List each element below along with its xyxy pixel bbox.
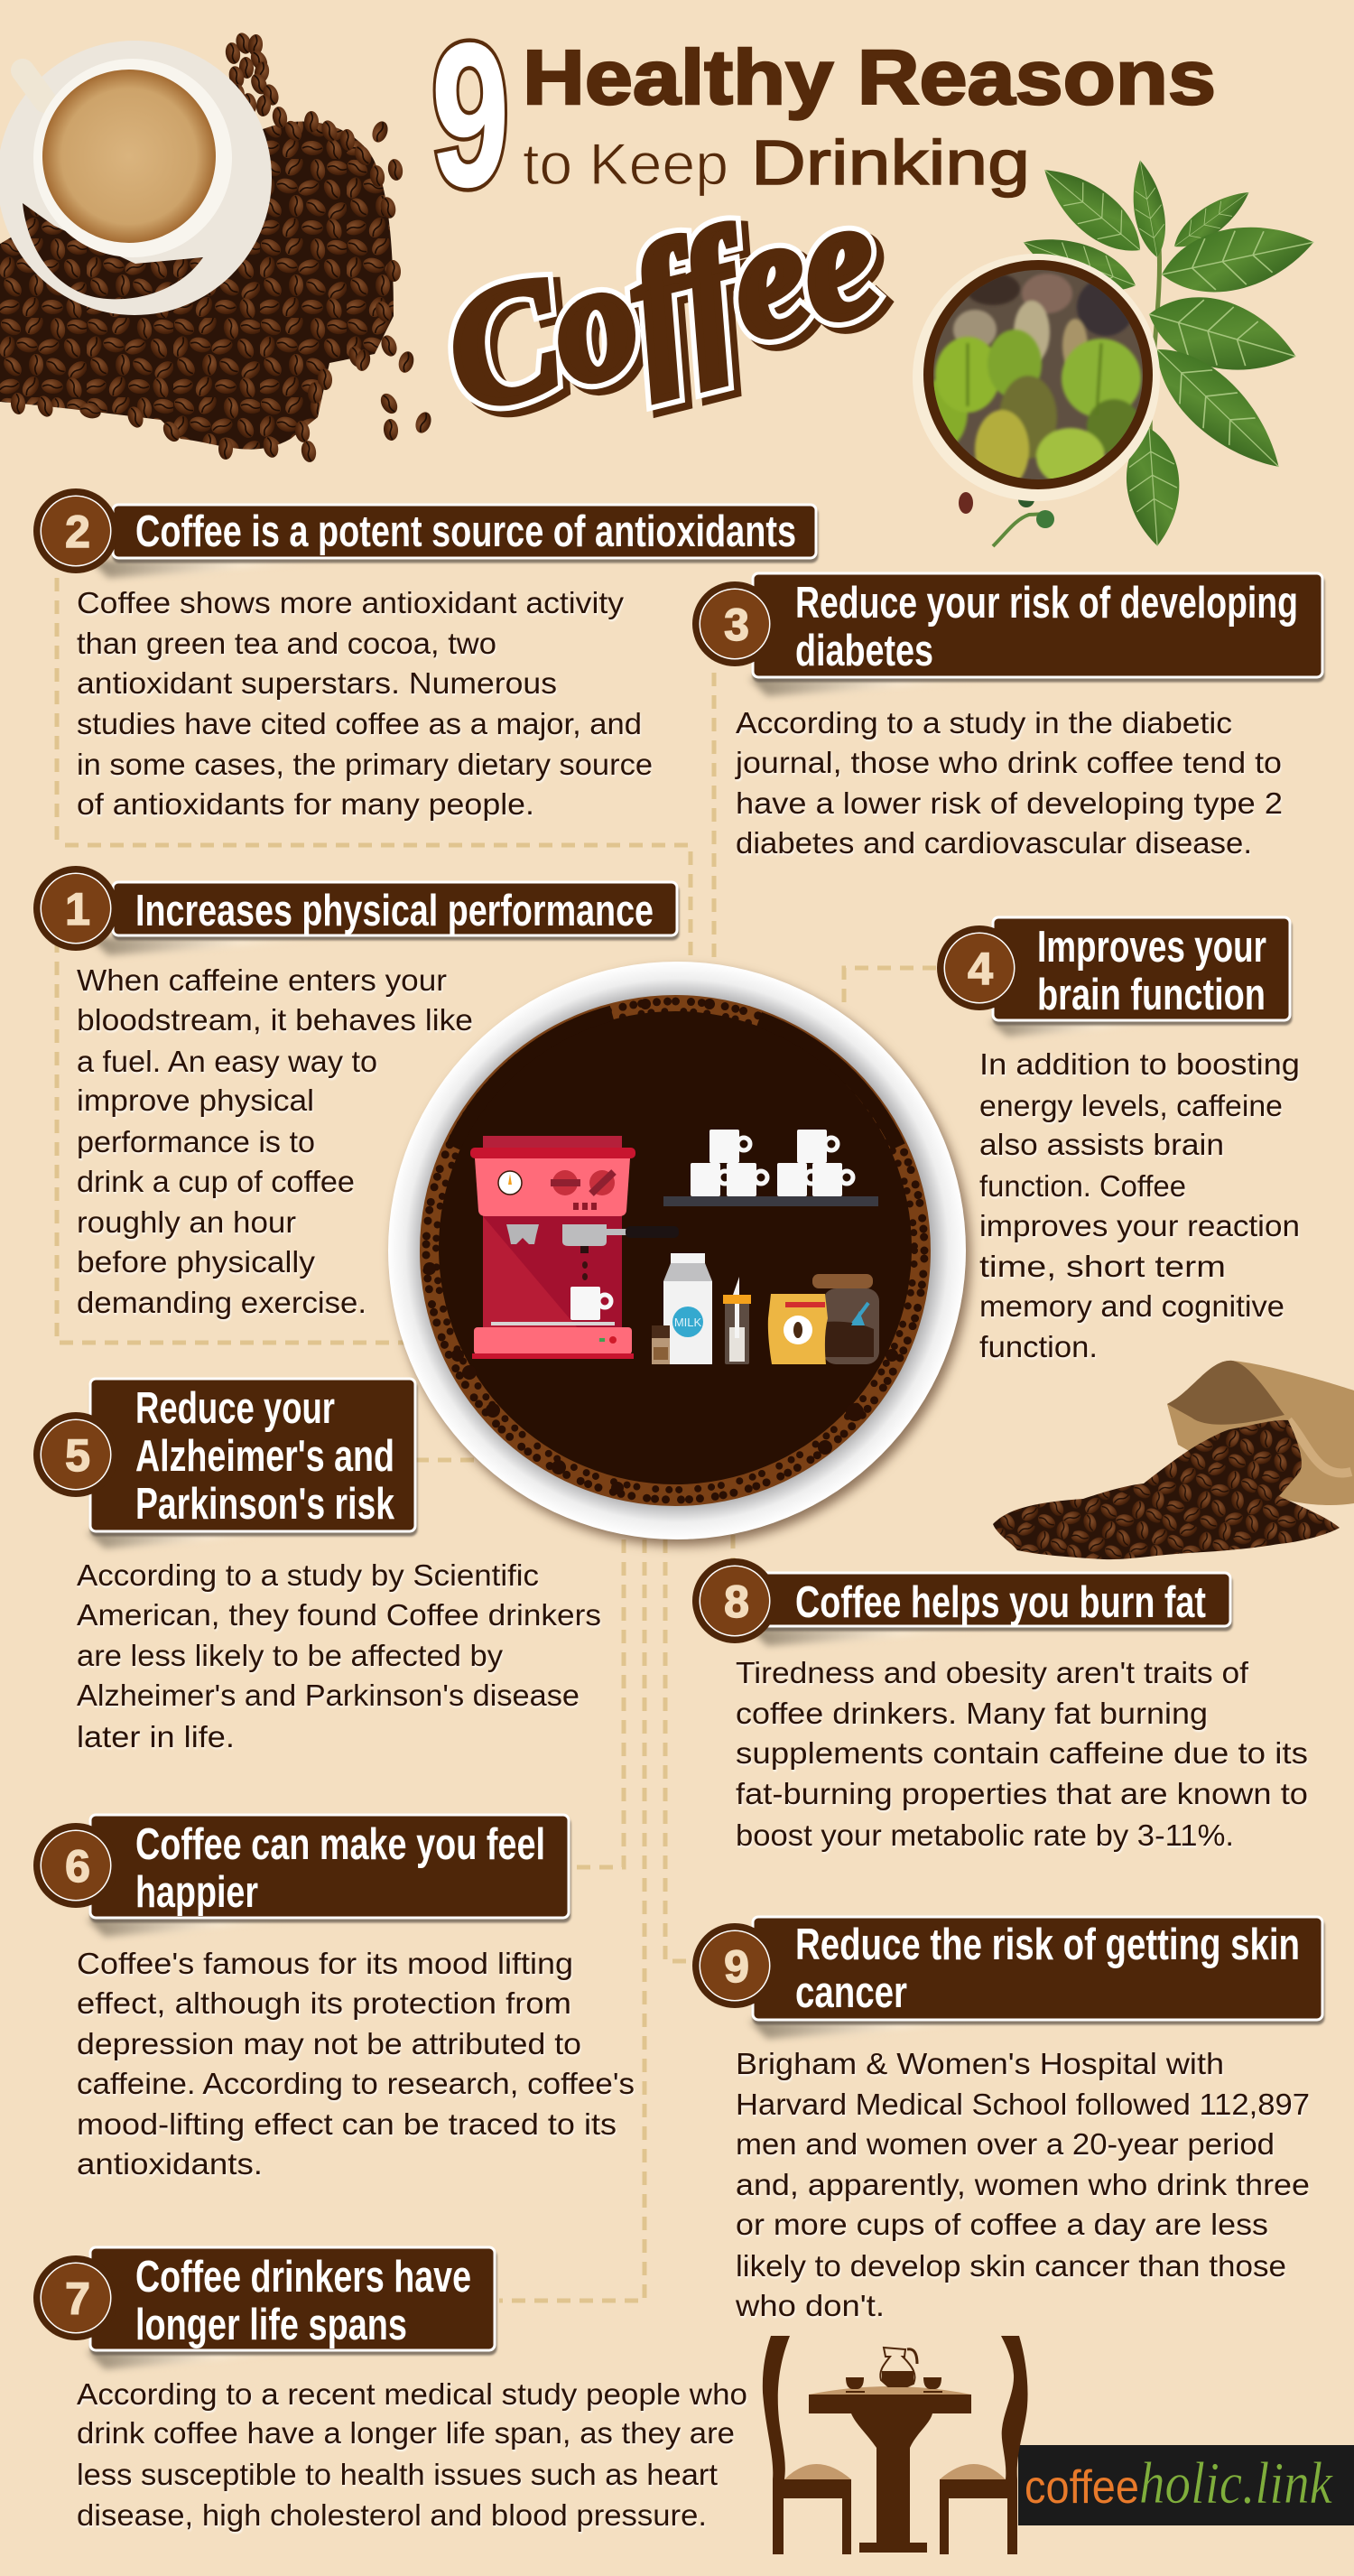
body text: performance is to: [77, 1125, 315, 1158]
body text: function.: [979, 1330, 1098, 1363]
body text: Tiredness and obesity aren't traits of: [736, 1656, 1249, 1689]
body text: antioxidant superstars. Numerous: [77, 666, 557, 700]
body text: diabetes and cardiovascular disease.: [736, 826, 1252, 860]
number badge: [937, 925, 1022, 1010]
heading bar: [87, 1815, 569, 1937]
heading bar: Reduce your: [135, 1384, 335, 1433]
script word Coffee: Coffee: [429, 163, 895, 447]
image: coffee cup on saucer with scattered beans: [0, 31, 434, 463]
coffee crema: [42, 70, 216, 243]
body text: bloodstream, it behaves like: [77, 1003, 473, 1037]
body text: of antioxidants for many people.: [77, 787, 534, 821]
body text: Harvard Medical School followed 112,897: [736, 2088, 1310, 2121]
body text: depression may not be attributed to: [77, 2027, 581, 2060]
script word Coffee: Coffee: [436, 168, 901, 452]
body text: American, they found Coffee drinkers: [77, 1598, 601, 1632]
sugar shaker: [723, 1277, 751, 1364]
body text: than green tea and cocoa, two: [77, 627, 496, 660]
stacked cups: [691, 1130, 853, 1196]
heading bar: Improves your: [1037, 923, 1266, 972]
image: burlap sack spilling coffee beans: [993, 1361, 1354, 1559]
body text: disease, high cholesterol and blood pressure.: [77, 2498, 707, 2532]
coffee surface bubbles: [420, 995, 931, 1506]
body text: men and women over a 20-year period: [736, 2127, 1275, 2161]
milk carton: [652, 1253, 712, 1364]
body text: a fuel. An easy way to: [77, 1045, 377, 1078]
number badge: [692, 581, 777, 666]
number badge: 1: [65, 884, 90, 935]
body text: have a lower risk of developing type 2: [736, 786, 1283, 820]
berries: [993, 514, 1045, 546]
body text: coffee drinkers. Many fat burning: [736, 1697, 1208, 1730]
heading bar: [749, 1917, 1322, 2039]
body text: memory and cognitive: [979, 1289, 1284, 1323]
heading bar: cancer: [795, 1968, 907, 2017]
number badge: [33, 1412, 118, 1497]
number badge: [692, 1923, 777, 2008]
body text: [77, 1558, 601, 1753]
heading bar: [87, 2247, 495, 2369]
bean circle halo: [913, 254, 1160, 501]
body text: [736, 1656, 1308, 1852]
heading bar: Parkinson's risk: [135, 1480, 395, 1529]
body text: [77, 586, 653, 821]
panel: reason 1: [33, 866, 677, 1319]
body text: According to a study by Scientific: [77, 1558, 539, 1592]
body text: When caffeine enters your: [77, 963, 447, 997]
title line 2: to Keep: [523, 131, 728, 197]
body text: fat-burning properties that are known to: [736, 1777, 1308, 1810]
heading bar: Alzheimer's and: [135, 1432, 394, 1481]
milk carton: MILK: [674, 1316, 701, 1329]
body text: time, short term: [979, 1250, 1226, 1283]
body text: function. Coffee: [979, 1169, 1186, 1203]
body text: likely to develop skin cancer than those: [736, 2249, 1286, 2283]
number badge: 9: [724, 1941, 749, 1992]
right chair: [940, 2336, 1028, 2554]
number badge: 5: [65, 1430, 90, 1481]
logo band: coffee: [1025, 2461, 1139, 2514]
number badge: [33, 866, 118, 951]
shelf: [663, 1196, 878, 1206]
body text: [77, 963, 473, 1319]
body text: are less likely to be affected by: [77, 1639, 504, 1672]
body text: [979, 1047, 1300, 1363]
title line 2 bold: Drinking: [751, 127, 1030, 198]
body text: later in life.: [77, 1720, 235, 1753]
body text: antioxidants.: [77, 2147, 263, 2181]
body text: journal, those who drink coffee tend to: [735, 746, 1282, 779]
body text: Alzheimer's and Parkinson's disease: [77, 1679, 580, 1712]
heading bar: diabetes: [795, 627, 933, 675]
heading bar: Coffee helps you burn fat: [795, 1578, 1206, 1627]
bean circle ring: [923, 260, 1153, 489]
body text: caffeine. According to research, coffee's: [77, 2067, 635, 2100]
body text: Coffee shows more antioxidant activity: [77, 586, 625, 619]
heading bar: [90, 882, 677, 955]
big numeral 9: [431, 1, 509, 228]
body text: also assists brain: [979, 1128, 1224, 1161]
body text: [735, 2047, 1310, 2322]
cup handle: [23, 70, 45, 101]
coffee pot and cups: [846, 2348, 942, 2393]
panel: reason 7: [33, 2247, 747, 2532]
body text: roughly an hour: [77, 1205, 296, 1239]
heading bar: happier: [135, 1868, 258, 1917]
body text: studies have cited coffee as a major, and: [77, 707, 642, 740]
body text: [77, 1947, 635, 2181]
body text: According to a recent medical study people who: [77, 2377, 747, 2411]
connector lines: [57, 578, 941, 2301]
big numeral 9: 9: [431, 1, 509, 228]
heading bar: [90, 505, 816, 578]
body text: [77, 2377, 747, 2532]
image: round coffee cup with espresso station: [388, 962, 966, 1539]
body text: [735, 706, 1283, 860]
left chair: [763, 2336, 851, 2554]
number badge: [33, 2255, 118, 2340]
white rim: [388, 962, 966, 1539]
number badge: [33, 1823, 118, 1908]
body text: demanding exercise.: [77, 1286, 366, 1319]
panel: reason 8: [692, 1558, 1308, 1852]
body text: drink a cup of coffee: [77, 1165, 355, 1198]
title line 1: Healthy Reasons: [523, 35, 1216, 121]
body text: effect, although its protection from: [77, 1986, 571, 2020]
number badge: 2: [65, 507, 90, 557]
title: [429, 1, 1216, 454]
heading bar: [989, 917, 1290, 1037]
espresso machine: [470, 1136, 679, 1359]
body text: According to a study in the diabetic: [736, 706, 1232, 739]
icon: cafe table and chairs: [763, 2336, 1028, 2554]
panel: reason 4: [937, 917, 1300, 1363]
body text: energy levels, caffeine: [979, 1089, 1283, 1122]
body text: and, apparently, women who drink three: [736, 2168, 1310, 2201]
panel: reason 6: [33, 1815, 635, 2181]
saucer: [0, 41, 272, 315]
number badge: 3: [724, 600, 749, 650]
body text: who don't.: [735, 2289, 885, 2322]
body text: in some cases, the primary dietary source: [77, 748, 653, 781]
body text: before physically: [77, 1245, 316, 1279]
body text: improves your reaction: [979, 1209, 1300, 1242]
heading bar: Coffee drinkers have: [135, 2253, 471, 2302]
panel: reason 2: [33, 488, 816, 821]
coffee bag: [768, 1294, 828, 1364]
body text: drink coffee have a longer life span, as they are: [77, 2416, 735, 2450]
body text: Brigham & Women's Hospital with: [736, 2047, 1224, 2080]
heading bar: brain function: [1037, 971, 1266, 1019]
heading bar: [749, 573, 1322, 696]
heading bar: Coffee is a potent source of antioxidants: [135, 507, 796, 556]
heading bar: longer life spans: [135, 2301, 407, 2349]
heading bar: Coffee can make you feel: [135, 1820, 545, 1869]
body text: or more cups of coffee a day are less: [736, 2208, 1268, 2241]
coffee jar: [812, 1274, 879, 1364]
cup: [33, 59, 232, 257]
number badge: [33, 488, 118, 573]
number badge: 6: [65, 1841, 90, 1892]
logo band: [1018, 2445, 1354, 2525]
number badge: 8: [724, 1576, 749, 1627]
body text: less susceptible to health issues such as heart: [77, 2458, 718, 2491]
script word Coffee: Coffee: [429, 163, 895, 447]
body text: mood-lifting effect can be traced to its: [77, 2107, 617, 2141]
body text: supplements contain caffeine due to its: [736, 1736, 1308, 1770]
heading bar: Increases physical performance: [135, 887, 654, 935]
number badge: [692, 1558, 777, 1643]
panel: reason 5: [33, 1379, 601, 1753]
table: [809, 2386, 971, 2553]
panel: reason 3: [692, 573, 1322, 860]
big numeral 9: 9: [431, 1, 509, 228]
number badge: 4: [968, 944, 993, 994]
body text: boost your metabolic rate by 3-11%.: [736, 1818, 1234, 1852]
number badge: 7: [65, 2274, 90, 2324]
heading bar: [87, 1379, 415, 1548]
body text: In addition to boosting: [979, 1047, 1300, 1081]
heading bar: [749, 1573, 1230, 1646]
panel: reason 9: [692, 1917, 1322, 2322]
body text: Coffee's famous for its mood lifting: [77, 1947, 573, 1980]
image: coffee leaves and green beans: [913, 153, 1320, 548]
body text: improve physical: [77, 1083, 314, 1117]
